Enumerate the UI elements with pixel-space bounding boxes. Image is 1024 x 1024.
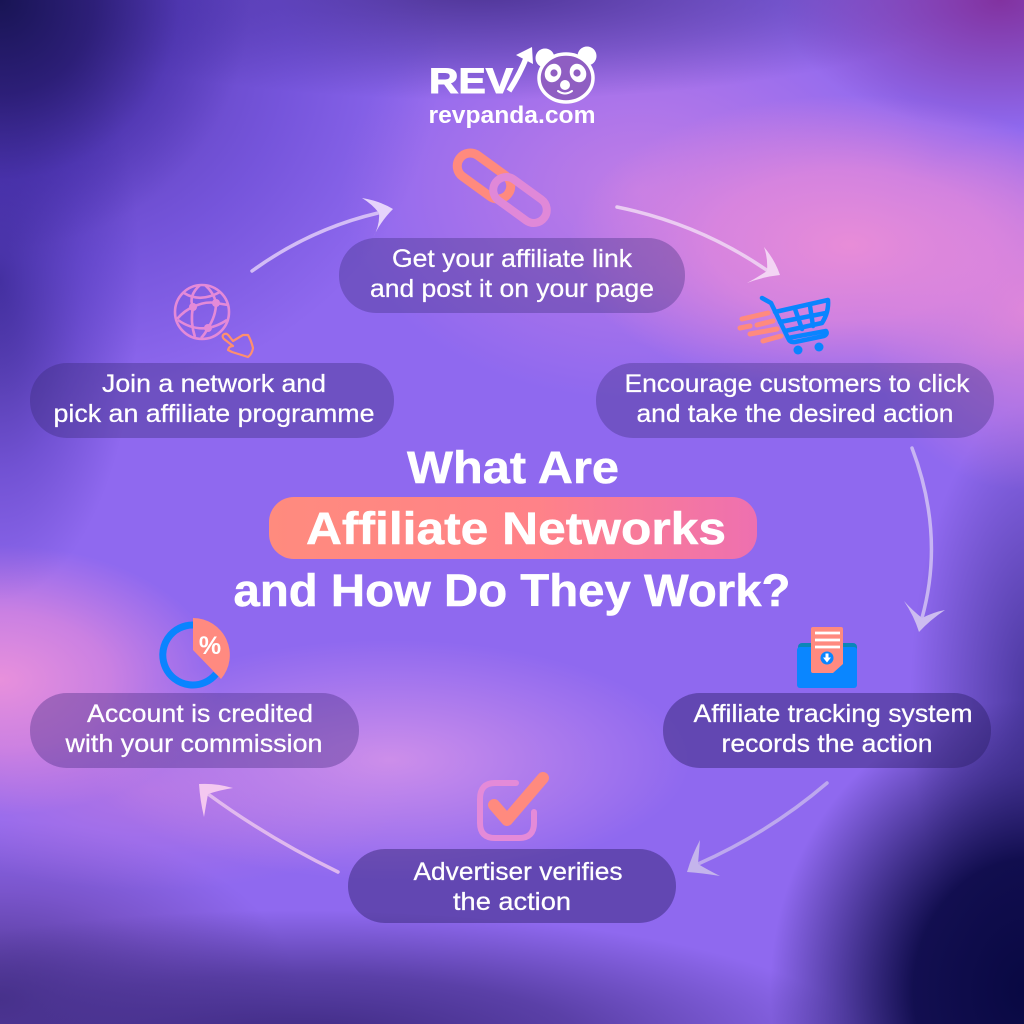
step: join a network: pick an affiliate programme <box>54 400 374 428</box>
step: account credited: with your commission <box>64 730 323 758</box>
icon: percent pie: % <box>199 632 221 660</box>
arrow: advertiser to account <box>199 784 338 872</box>
title highlight pill <box>269 497 757 559</box>
icon: percent pie <box>163 618 230 685</box>
logo wordmark: REV <box>429 62 514 101</box>
step: encourage customers: Encourage customers to click <box>624 370 970 398</box>
step: tracking system: Affiliate tracking system <box>694 700 972 728</box>
step: get affiliate link <box>339 238 685 313</box>
step: advertiser verifies <box>348 849 676 923</box>
icon: globe with hand cursor <box>175 285 253 357</box>
logo url: revpanda.com <box>428 102 596 129</box>
step: account credited <box>30 693 359 768</box>
icon: chain link <box>452 148 552 228</box>
title line 1: What Are <box>407 442 619 493</box>
step: join a network <box>30 363 394 438</box>
logo: Rev panda <box>428 46 596 129</box>
arrow: join to link <box>252 198 393 271</box>
title <box>234 442 790 616</box>
step: account credited: Account is credited <box>87 700 313 728</box>
step: get affiliate link: Get your affiliate link <box>392 245 633 273</box>
title line 3: and How Do They Work? <box>234 565 790 616</box>
step: tracking system <box>663 693 991 768</box>
step: join a network: Join a network and <box>102 370 326 398</box>
step: tracking system: records the action <box>722 730 932 758</box>
icon: folder with document <box>797 627 857 688</box>
logo growth arrow <box>509 47 533 91</box>
step: advertiser verifies: the action <box>453 888 571 916</box>
logo panda face <box>536 46 596 102</box>
arrow: customers to tracking <box>904 448 945 632</box>
arrow: tracking to advertiser <box>687 783 827 876</box>
step: advertiser verifies: Advertiser verifies <box>414 858 622 886</box>
step: encourage customers: and take the desired action <box>636 400 954 428</box>
icon: shopping cart <box>740 298 828 354</box>
title line 2: Affiliate Networks <box>306 503 726 554</box>
step: encourage customers <box>596 363 994 438</box>
icon: checkbox tick <box>480 778 543 838</box>
arrow: link to customers <box>617 207 780 283</box>
step: get affiliate link: and post it on your page <box>370 275 654 303</box>
